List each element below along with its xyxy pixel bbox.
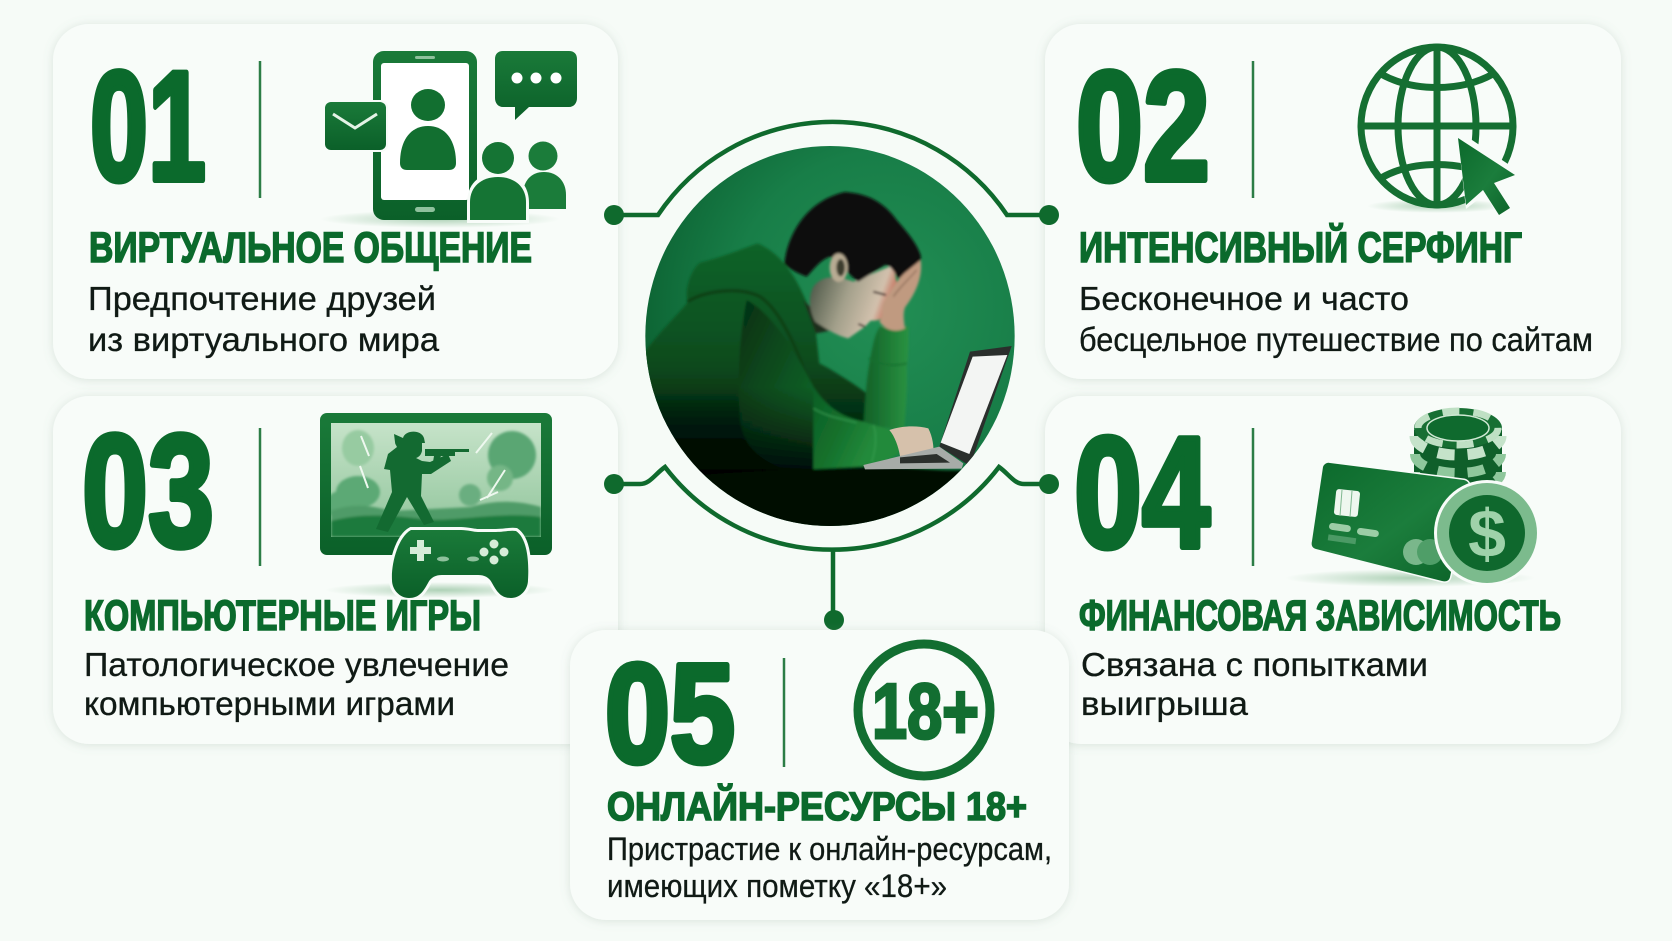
soldier silhouette	[376, 432, 451, 532]
upper arm and lower sleeve	[739, 300, 899, 471]
description: бесцельное путешествие по сайтам	[1079, 321, 1593, 358]
description: Пристрастие к онлайн-ресурсам,	[607, 831, 1052, 867]
hair	[784, 192, 921, 282]
heading: ВИРТУАЛЬНОЕ ОБЩЕНИЕ	[89, 224, 532, 272]
panel: 05 online resources 18+	[570, 630, 1069, 920]
icon: credit card, chips and coin: $	[1468, 496, 1506, 572]
heading: ИНТЕНСИВНЫЙ СЕРФИНГ	[1079, 223, 1522, 272]
icon: credit card, chips and coin	[1285, 408, 1540, 587]
eye and lip shading	[858, 292, 886, 327]
description: Патологическое увлечение	[84, 646, 509, 683]
icon: 18+ badge	[858, 644, 990, 776]
icon: globe with cursor	[1361, 47, 1523, 221]
hand on keyboard	[889, 426, 933, 456]
number 05: 05	[605, 634, 735, 792]
description	[88, 280, 440, 358]
hand on head	[879, 260, 921, 331]
number 04: 04	[1074, 405, 1210, 581]
description: выигрыша	[1081, 685, 1249, 722]
face	[810, 265, 897, 338]
hood fold	[686, 288, 802, 361]
description: компьютерными играми	[84, 685, 455, 722]
hoodie torso and hood	[646, 243, 939, 472]
panel: 02 intensive surfing	[1045, 24, 1621, 379]
connector ring and nodes	[604, 122, 1059, 630]
icon: phone with contacts and messages	[320, 51, 577, 228]
description: имеющих пометку «18+»	[607, 868, 947, 904]
raised forearm	[863, 326, 908, 430]
icon: 18+ badge: 18+	[872, 667, 979, 755]
number 02: 02	[1076, 40, 1210, 214]
description: Бесконечное и часто	[1079, 280, 1409, 317]
heading: КОМПЬЮТЕРНЫЕ ИГРЫ	[84, 592, 481, 640]
laptop	[939, 346, 1012, 466]
neck shadow	[804, 301, 830, 334]
number 03: 03	[82, 401, 214, 580]
number 01: 01	[90, 40, 206, 214]
central photo: man at laptop	[637, 143, 1020, 533]
panel: 04 financial addiction	[1045, 396, 1621, 744]
ear	[830, 253, 848, 282]
panel: 01 virtual communication	[53, 24, 618, 379]
description	[1079, 280, 1593, 358]
description	[607, 831, 1052, 904]
lower-left shadow	[655, 393, 816, 475]
dark lap	[704, 468, 962, 494]
panel: 03 computer games	[53, 396, 618, 744]
description: из виртуального мира	[88, 321, 440, 358]
description	[84, 646, 509, 722]
description: Предпочтение друзей	[88, 280, 436, 317]
description: Связана с попытками	[1081, 646, 1428, 683]
description	[1081, 646, 1428, 722]
icon: game monitor and controller	[320, 413, 555, 598]
heading: ОНЛАЙН-РЕСУРСЫ 18+	[607, 783, 1027, 829]
